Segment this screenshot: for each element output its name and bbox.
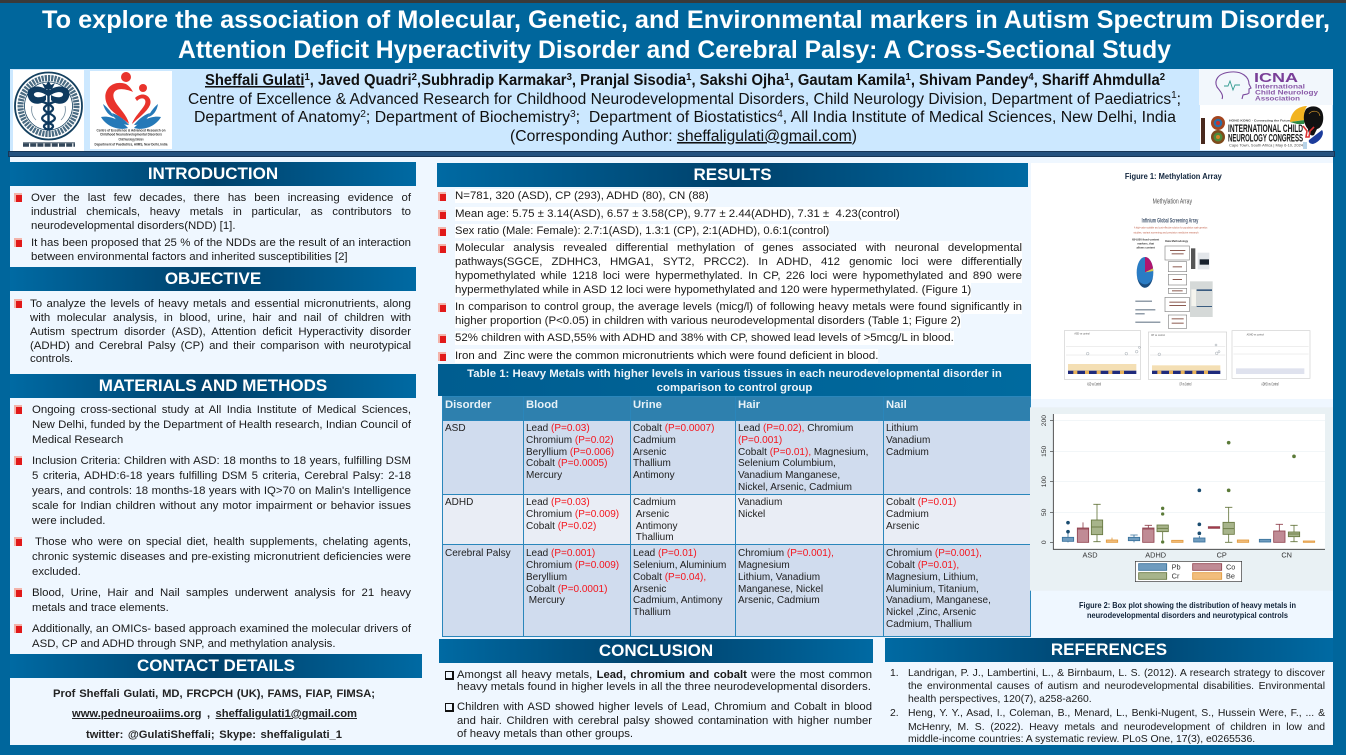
- authors and affiliations: ,Subhradip Karmakar: [417, 72, 567, 89]
- authors and affiliations: 1: [1171, 90, 1177, 101]
- heading: materials and methods: MATERIALS AND METHODS: [99, 376, 327, 395]
- figure 2: box plot: [1030, 407, 1333, 591]
- table 1: heavy metals: Urine: [633, 399, 662, 411]
- figure 1: methylation array: CP vs control: [1151, 334, 1165, 337]
- table title bar: Table 1: Heavy Metals with higher levels in various tissues in each neurodevelopmental disorder in: [467, 368, 1002, 380]
- authors and affiliations: , Shivam Pandey: [911, 72, 1029, 89]
- text: introduction: industrial chemicals, heavy metals in particular, as contributors to: [31, 206, 411, 218]
- table 1: heavy metals: Cadmium, Antimony: [633, 595, 722, 606]
- table 1: heavy metals: ADHD: [445, 497, 473, 508]
- table 1: heavy metals: Cobalt (P=0.0007): [633, 423, 714, 434]
- legend: [1135, 561, 1242, 582]
- authors and affiliations: , Shariff Ahmdulla: [1034, 72, 1160, 89]
- table 1: heavy metals: Cadmium: [886, 509, 929, 520]
- text: conclusion: heavy metals found in higher levels in all the three neurodevelopmental disorders.: [457, 681, 871, 693]
- text: materials and methods: Inclusion Criteria: Children with ASD: 18 months to 18 years, fulfilling DSM: [32, 455, 411, 467]
- text: references: [890, 668, 1325, 745]
- logo: centre of excellence heart: Centre of Excellence & Advanced Research on: [96, 128, 166, 132]
- table title bar: [438, 364, 1031, 396]
- text: materials and methods: 5 criteria, ADHD:6-18 years fulfilling DSM 5 criteria, Cerebral Palsy: 2-18: [32, 470, 411, 482]
- text: contact details: Prof Sheffali Gulati, MD, FRCPCH (UK), FAMS, FIAP, FIMSA;: [53, 688, 375, 700]
- figure 2: box plot: 0: [1041, 540, 1048, 544]
- text: materials and methods: excluded.: [32, 566, 81, 578]
- text: introduction: It has been proposed that 25 % of the NDDs are the result of an interaction: [31, 237, 411, 249]
- table 1: heavy metals: Chromium (P=0.001),: [738, 548, 834, 559]
- text: objective: with molecular analysis, in blood, urine, hair and nail of children with: [30, 312, 411, 324]
- table 1: heavy metals: Magnesium, Lithium,: [886, 572, 978, 583]
- figure 1: methylation array: Infinium Global Screening Array: [1142, 217, 1198, 224]
- heading: results: [437, 163, 1028, 187]
- table 1: heavy metals: Arsenic: [886, 521, 919, 532]
- table 1: heavy metals: Cerebral Palsy: [445, 548, 511, 559]
- text: results: hypermethylated while in ASD 12 loci were hypomethylated and 120 were hypermethylated. (Figure 1): [455, 284, 971, 296]
- heading: introduction: INTRODUCTION: [148, 164, 278, 183]
- text: materials and methods: Blood, Urine, Hair and Nail samples underwent analysis for 21 heavy: [32, 587, 411, 599]
- table 1: heavy metals: Cobalt (P=0.01),: [886, 560, 959, 571]
- text: results: Molecular analysis revealed differential methylation of genes associated with neuronal developmental: [455, 242, 1022, 254]
- title: Attention Deficit Hyperactivity Disorder and Cerebral Palsy: A Cross-Sectional Study: [178, 36, 1171, 64]
- logo: ICNA: [1199, 69, 1333, 105]
- heading: conclusion: CONCLUSION: [599, 641, 713, 660]
- table 1: heavy metals: Blood: [526, 399, 558, 411]
- table 1: heavy metals: Nickel, Arsenic, Cadmium: [738, 482, 852, 493]
- table 1: heavy metals: Arsenic: [633, 447, 666, 458]
- table 1: heavy metals: Cadmium: [633, 435, 676, 446]
- box group: CN: [1259, 454, 1315, 542]
- figure 1: methylation array: Data Methodology: [1165, 239, 1189, 243]
- table 1: heavy metals: Arsenic, Cadmium: [738, 595, 820, 606]
- figure 1: methylation array: A high-value scalable and cost-effective solution for population scale genetics: [1134, 226, 1208, 230]
- text: materials and methods: chronic systemic diseases and pre-existing micronutrient deficiencies were: [32, 551, 411, 563]
- heading: objective: [10, 267, 416, 291]
- table 1: heavy metals: Antimony: [633, 470, 675, 481]
- authors and affiliations: 1: [304, 72, 310, 83]
- authors and affiliations: 3: [570, 109, 576, 120]
- table 1: heavy metals: Lead (P=0.03): [526, 423, 590, 434]
- table title bar: comparison to control group: [657, 382, 812, 394]
- table 1: heavy metals: Vanadium: [738, 497, 782, 508]
- heading: conclusion: [439, 639, 873, 663]
- figure 1: methylation array: [1031, 163, 1333, 399]
- logo: ICNA: International: [1255, 85, 1305, 91]
- authors and affiliations: , Gautam Kamila: [790, 72, 906, 89]
- authors and affiliations: 2: [1160, 72, 1165, 83]
- figure 2: box plot: 100: [1041, 476, 1048, 487]
- logo: centre of excellence heart: Child Neurology Division: [118, 138, 144, 142]
- figure 2: box plot: 150: [1041, 445, 1048, 457]
- table 1: heavy metals: Cobalt (P=0.04),: [633, 572, 706, 583]
- figure 2 caption: Figure 2: Box plot showing the distribution of heavy metals in: [1079, 600, 1296, 610]
- table 1: heavy metals: Mercury: [526, 470, 562, 481]
- authors and affiliations: , Pranjal Sisodia: [572, 72, 686, 89]
- text: contact details: twitter: @GulatiSheffali; Skype: sheffaligulati_1: [86, 729, 342, 741]
- figure 2 caption: [1079, 600, 1296, 620]
- figure 1: methylation array: Methylation Array: [1153, 197, 1192, 206]
- figure 1: methylation array: markers, that: [1137, 241, 1154, 245]
- figure 1: methylation array: ASD vs control: [1074, 332, 1090, 335]
- text: conclusion: Amongst all heavy metals, Lead, chromium and cobalt were the most common: [457, 669, 872, 681]
- text: introduction: Over the last few decades, there has been increasing evidence of: [31, 192, 411, 204]
- table 1: heavy metals: Chromium (P=0.02): [526, 435, 614, 446]
- logo: AIIMS seal: [13, 70, 84, 151]
- text: references: health perspectives, 120(7), a258-a260.: [908, 694, 1092, 705]
- table 1: heavy metals: Lithium, Vanadium: [738, 572, 820, 583]
- authors and affiliations: , All India Institute of Medical Sciences, New Delhi, India: [783, 109, 1176, 126]
- title: To explore the association of Molecular, Genetic, and Environmental markers in Autism Spectrum Disorder,: [42, 6, 1330, 34]
- figure 2: box plot: 50: [1041, 508, 1048, 516]
- heading: materials and methods: [10, 374, 416, 398]
- authors and affiliations: 4: [1028, 72, 1034, 83]
- authors and affiliations: ; Department of Biostatistics: [576, 109, 777, 126]
- logo: International Child Neurology Congress: Cape Town, South Africa | May 6-10, 2024: [1229, 142, 1304, 148]
- table 1: heavy metals: Cadmium: [633, 497, 676, 508]
- legend: Pb: [1172, 563, 1181, 572]
- table 1: heavy metals: Magnesium: [738, 560, 790, 571]
- authors and affiliations: 3: [567, 72, 572, 83]
- title: [42, 6, 1330, 64]
- authors and affiliations: 1: [784, 72, 790, 83]
- text: materials and methods: Those who were on special diet, health supplements, chelating agents,: [35, 536, 411, 548]
- text: results: Sex ratio (Male: Female): 2.7:1(ASD), 1.3:1 (CP), 2:1(ADHD), 0.6:1(control): [455, 225, 829, 237]
- logo: ICNA: Child Neurology: [1255, 91, 1319, 97]
- table 1: heavy metals: Cobalt (P=0.0005): [526, 458, 607, 469]
- table 1: heavy metals: Beryllium: [526, 572, 567, 583]
- text: results: In comparison to control group, the average levels (micg/l) of following heavy metals were found significantly in: [455, 301, 1022, 313]
- text: contact details: [53, 688, 375, 741]
- table 1: heavy metals: Nail: [886, 399, 907, 411]
- main content panel: [10, 156, 1333, 745]
- text: materials and methods: scale for Indian children without any motor impairment or behavior issues: [32, 500, 411, 512]
- figure 2: box plot: 200: [1041, 415, 1048, 426]
- authors and affiliations: 4: [777, 109, 783, 120]
- logo: International Child Neurology Congress: HONG KONG · Connecting the Future: [1229, 118, 1291, 122]
- heading: objective: OBJECTIVE: [165, 269, 261, 288]
- table 1: heavy metals: [442, 396, 1031, 637]
- logo: centre of excellence heart: [90, 71, 172, 149]
- divider bar: [8, 151, 1335, 157]
- text: results: hypomethylated while 1218 loci were hypermethylated. In CP, 226 loci were hypomethylated and 890 were: [455, 270, 1022, 282]
- authors and affiliations: ; Department of Biochemistry: [366, 109, 570, 126]
- text: results: pathways(SGCE, ZDHHC3, HMGA1, SYT2, PRCC2). In ADHD, 412 genomic loci were differentially: [455, 256, 1022, 268]
- text: 1.: [890, 668, 899, 679]
- authors and affiliations: 2: [360, 109, 366, 120]
- heading: results: RESULTS: [693, 165, 772, 184]
- table 1: heavy metals: Cadmium: [886, 447, 929, 458]
- figure 1: methylation array: ADHD vs control: [1247, 334, 1264, 337]
- figure 1: methylation array: allows content: [1136, 245, 1155, 249]
- text: conclusion: of heavy metals than other groups.: [457, 728, 633, 740]
- text: objective: Autism spectrum disorder (ASD), Attention deficit Hyperactivity disorder: [30, 326, 411, 338]
- table 1: heavy metals: Nickel: [738, 509, 765, 520]
- table 1: heavy metals: Mercury: [529, 595, 565, 606]
- figure 2: box plot: CP: [1217, 551, 1227, 560]
- table 1: heavy metals: Beryllium (P=0.006): [526, 447, 614, 458]
- table 1: heavy metals: Nickel ,Zinc, Arsenic: [886, 607, 976, 618]
- logo: ICNA: Association: [1255, 96, 1300, 102]
- authors and affiliations: , Sakshi Ojha: [691, 72, 785, 89]
- table 1: heavy metals: Arsenic: [633, 584, 666, 595]
- figure 2: box plot: ADHD: [1145, 551, 1166, 560]
- authors and affiliations: ;: [1177, 91, 1181, 108]
- text: materials and methods: New Delhi, funded by the Department of Health research, Indian Council of: [32, 419, 411, 431]
- heading: references: REFERENCES: [1051, 640, 1167, 659]
- table 1: heavy metals: Vanadium: [886, 435, 930, 446]
- text: references: the environmental causes of autism and neurodevelopmental disabilities. Environmental: [908, 681, 1325, 692]
- text: contact details: www.pedneuroaiims.org , sheffaligulati1@gmail.com: [72, 708, 357, 720]
- table 1: heavy metals: ASD: [445, 423, 466, 434]
- table 1: heavy metals: Chromium (P=0.001),: [886, 548, 982, 559]
- table 1: heavy metals: Cobalt (P=0.01): [886, 497, 956, 508]
- text: materials and methods: metals and trace elements.: [32, 602, 169, 614]
- box group: ADHD: [1128, 507, 1183, 544]
- text: materials and methods: [14, 404, 412, 650]
- table 1: heavy metals: Thallium: [636, 532, 674, 543]
- text: materials and methods: Ongoing cross-sectional study at All India Institute of Medical Sciences,: [32, 404, 411, 416]
- table 1: heavy metals: Aluminium, Titanium,: [886, 584, 979, 595]
- logo: International Child Neurology Congress: [1200, 105, 1332, 150]
- heading: introduction: [10, 162, 416, 186]
- logo: centre of excellence heart: Childhood Neurodevelopmental Disorders: [100, 132, 162, 136]
- figure 1: methylation array: studies, variant screening and precision medicine research: [1134, 230, 1199, 234]
- table 1: heavy metals: Antimony: [636, 521, 677, 532]
- text: 2.: [890, 708, 899, 719]
- table 1: heavy metals: Manganese, Nickel: [738, 584, 823, 595]
- text: references: middle-income countries: A systematic review. PLoS One, 17(3), e0265536.: [908, 734, 1255, 745]
- authors and affiliations: [188, 72, 1181, 145]
- figure 1: methylation array: CP vs Control: [1179, 382, 1191, 387]
- table 1: heavy metals: Arsenic: [636, 509, 669, 520]
- figure 1: methylation array: ASD vs Control: [1087, 382, 1101, 387]
- heading: contact details: [10, 654, 422, 678]
- authors and affiliations: Centre of Excellence & Advanced Research for Childhood Neurodevelopmental Disorders, Child Neurology Division, Department of Paediatrics: [188, 91, 1168, 108]
- table 1: heavy metals: Lead (P=0.001): [526, 548, 595, 559]
- text: conclusion: and hair. Children with cerebral palsy showed contamination with higher number: [457, 715, 872, 727]
- table 1: heavy metals: (P=0.001): [738, 435, 782, 446]
- text: objective: To analyze the levels of heavy metals and essential micronutrients, along: [30, 298, 411, 310]
- table 1: heavy metals: Selenium Columbium,: [738, 458, 836, 469]
- text: references: McHenry, M. S. (2022). Heavy metals and neurodevelopment of children in low and: [908, 722, 1325, 733]
- text: conclusion: [445, 669, 872, 740]
- authors and affiliations: 1: [906, 72, 911, 83]
- figure 2 caption: neurodevelopmental disorders and neurotypical controls: [1087, 610, 1288, 620]
- text: objective: [14, 298, 411, 365]
- authors and affiliations: Sheffali Gulati: [205, 72, 304, 89]
- text: introduction: neurodevelopmental disorders(NDD) [1].: [31, 220, 236, 232]
- figure 1: methylation array: Figure 1: Methylation Array: [1125, 172, 1222, 181]
- table 1: heavy metals: Vanadium Manganese,: [738, 470, 840, 481]
- table 1: heavy metals: Vanadium, Manganese,: [886, 595, 991, 606]
- box group: CP: [1194, 441, 1249, 542]
- header band: authors and logos: [10, 69, 1333, 152]
- text: results: N=781, 320 (ASD), CP (293), ADHD (80), CN (88): [455, 190, 709, 202]
- logo: ICNA: ICNA: [1254, 71, 1298, 85]
- top edge strip: [0, 0, 1346, 3]
- legend: Cr: [1172, 572, 1180, 581]
- figure 1: methylation array: 654,000 fixed-content: [1132, 238, 1159, 242]
- table 1: heavy metals: Lead (P=0.03): [526, 497, 590, 508]
- table 1: heavy metals: Thallium: [633, 458, 671, 469]
- authors and affiliations: (Corresponding Author: sheffaligulati@gmail.com): [510, 128, 857, 145]
- table 1: heavy metals: Cadmium, Thallium: [886, 619, 972, 630]
- text: conclusion: Children with ASD showed higher levels of Lead, Chromium and Cobalt in blood: [457, 701, 872, 713]
- text: introduction: [14, 192, 412, 263]
- text: results: 52% children with ASD,55% with ADHD and 38% with CP, showed lead levels of >5mcg/L in blood.: [455, 332, 954, 344]
- text: results: higher proportion (P<0.05) in children with various neurodevelopmental disorders (Table 1; Figure 2): [455, 315, 961, 327]
- text: objective: controls.: [30, 353, 73, 365]
- table 1: heavy metals: Disorder: [445, 399, 491, 411]
- authors and affiliations: 2: [412, 72, 417, 83]
- text: results: Iron and Zinc were the common micronutrients which were found deficient in blood.: [455, 350, 878, 362]
- table 1: heavy metals: Lead (P=0.01): [633, 548, 697, 559]
- table 1: heavy metals: Chromium (P=0.009): [526, 560, 619, 571]
- table 1: heavy metals: Selenium, Aluminium: [633, 560, 726, 571]
- legend: Co: [1226, 563, 1235, 572]
- text: materials and methods: Additionally, an OMICs- based approach examined the molecular drivers of: [32, 623, 411, 635]
- authors and affiliations: Department of Anatomy: [194, 109, 357, 126]
- table 1: heavy metals: Lithium: [886, 423, 918, 434]
- text: objective: (ADHD) and Cerebral Palsy (CP) and their comparison with neurotypical: [30, 340, 411, 352]
- text: references: Landrigan, P. J., Lambertini, L., & Birnbaum, L. S. (2012). A research strategy to discover: [908, 668, 1325, 679]
- table 1: heavy metals: Cobalt (P=0.01), Magnesium,: [738, 447, 868, 458]
- figure 2: box plot: ASD: [1082, 551, 1098, 560]
- heading: contact details: CONTACT DETAILS: [137, 656, 295, 675]
- text: materials and methods: years, and controls: 18 months-18 years with IQ>70 on Malin's Intelligence: [32, 485, 411, 497]
- table 1: heavy metals: Hair: [738, 399, 760, 411]
- text: results: Mean age: 5.75 ± 3.14(ASD), 6.57 ± 3.58(CP), 9.77 ± 2.44(ADHD), 7.31 ± 4.23(control): [455, 208, 900, 220]
- text: references: Heng, Y. Y., Asad, I., Coleman, B., Menard, L., Benki-Nugent, S., Hussein Were, F., ... &: [908, 708, 1325, 719]
- table 1: heavy metals: Cobalt (P=0.0001): [526, 584, 607, 595]
- text: materials and methods: were included.: [32, 515, 105, 527]
- table 1: heavy metals: Cobalt (P=0.02): [526, 521, 596, 532]
- logo: centre of excellence heart: Department of Paediatrics, AIIMS, New Delhi, India: [94, 142, 168, 146]
- authors and affiliations: , Javed Quadri: [310, 72, 412, 89]
- figure 2: box plot: CN: [1281, 551, 1292, 560]
- text: results: [438, 189, 1022, 363]
- heading: references: [885, 638, 1333, 662]
- text: materials and methods: Medical Research: [32, 434, 123, 446]
- table 1: heavy metals: Chromium (P=0.009): [526, 509, 619, 520]
- table 1: heavy metals: Lead (P=0.02), Chromium: [738, 423, 853, 434]
- text: introduction: between environmental factors and inherited susceptibilities [2]: [31, 251, 348, 263]
- table 1: heavy metals: Thallium: [633, 607, 671, 618]
- authors and affiliations: 1: [686, 72, 692, 83]
- legend: Be: [1226, 572, 1235, 581]
- text: materials and methods: ASD, CP and ADHD through SNP, and methylation analysis.: [32, 638, 336, 650]
- box group: ASD: [1062, 504, 1118, 542]
- figure 1: methylation array: ADHD vs Control: [1261, 382, 1279, 387]
